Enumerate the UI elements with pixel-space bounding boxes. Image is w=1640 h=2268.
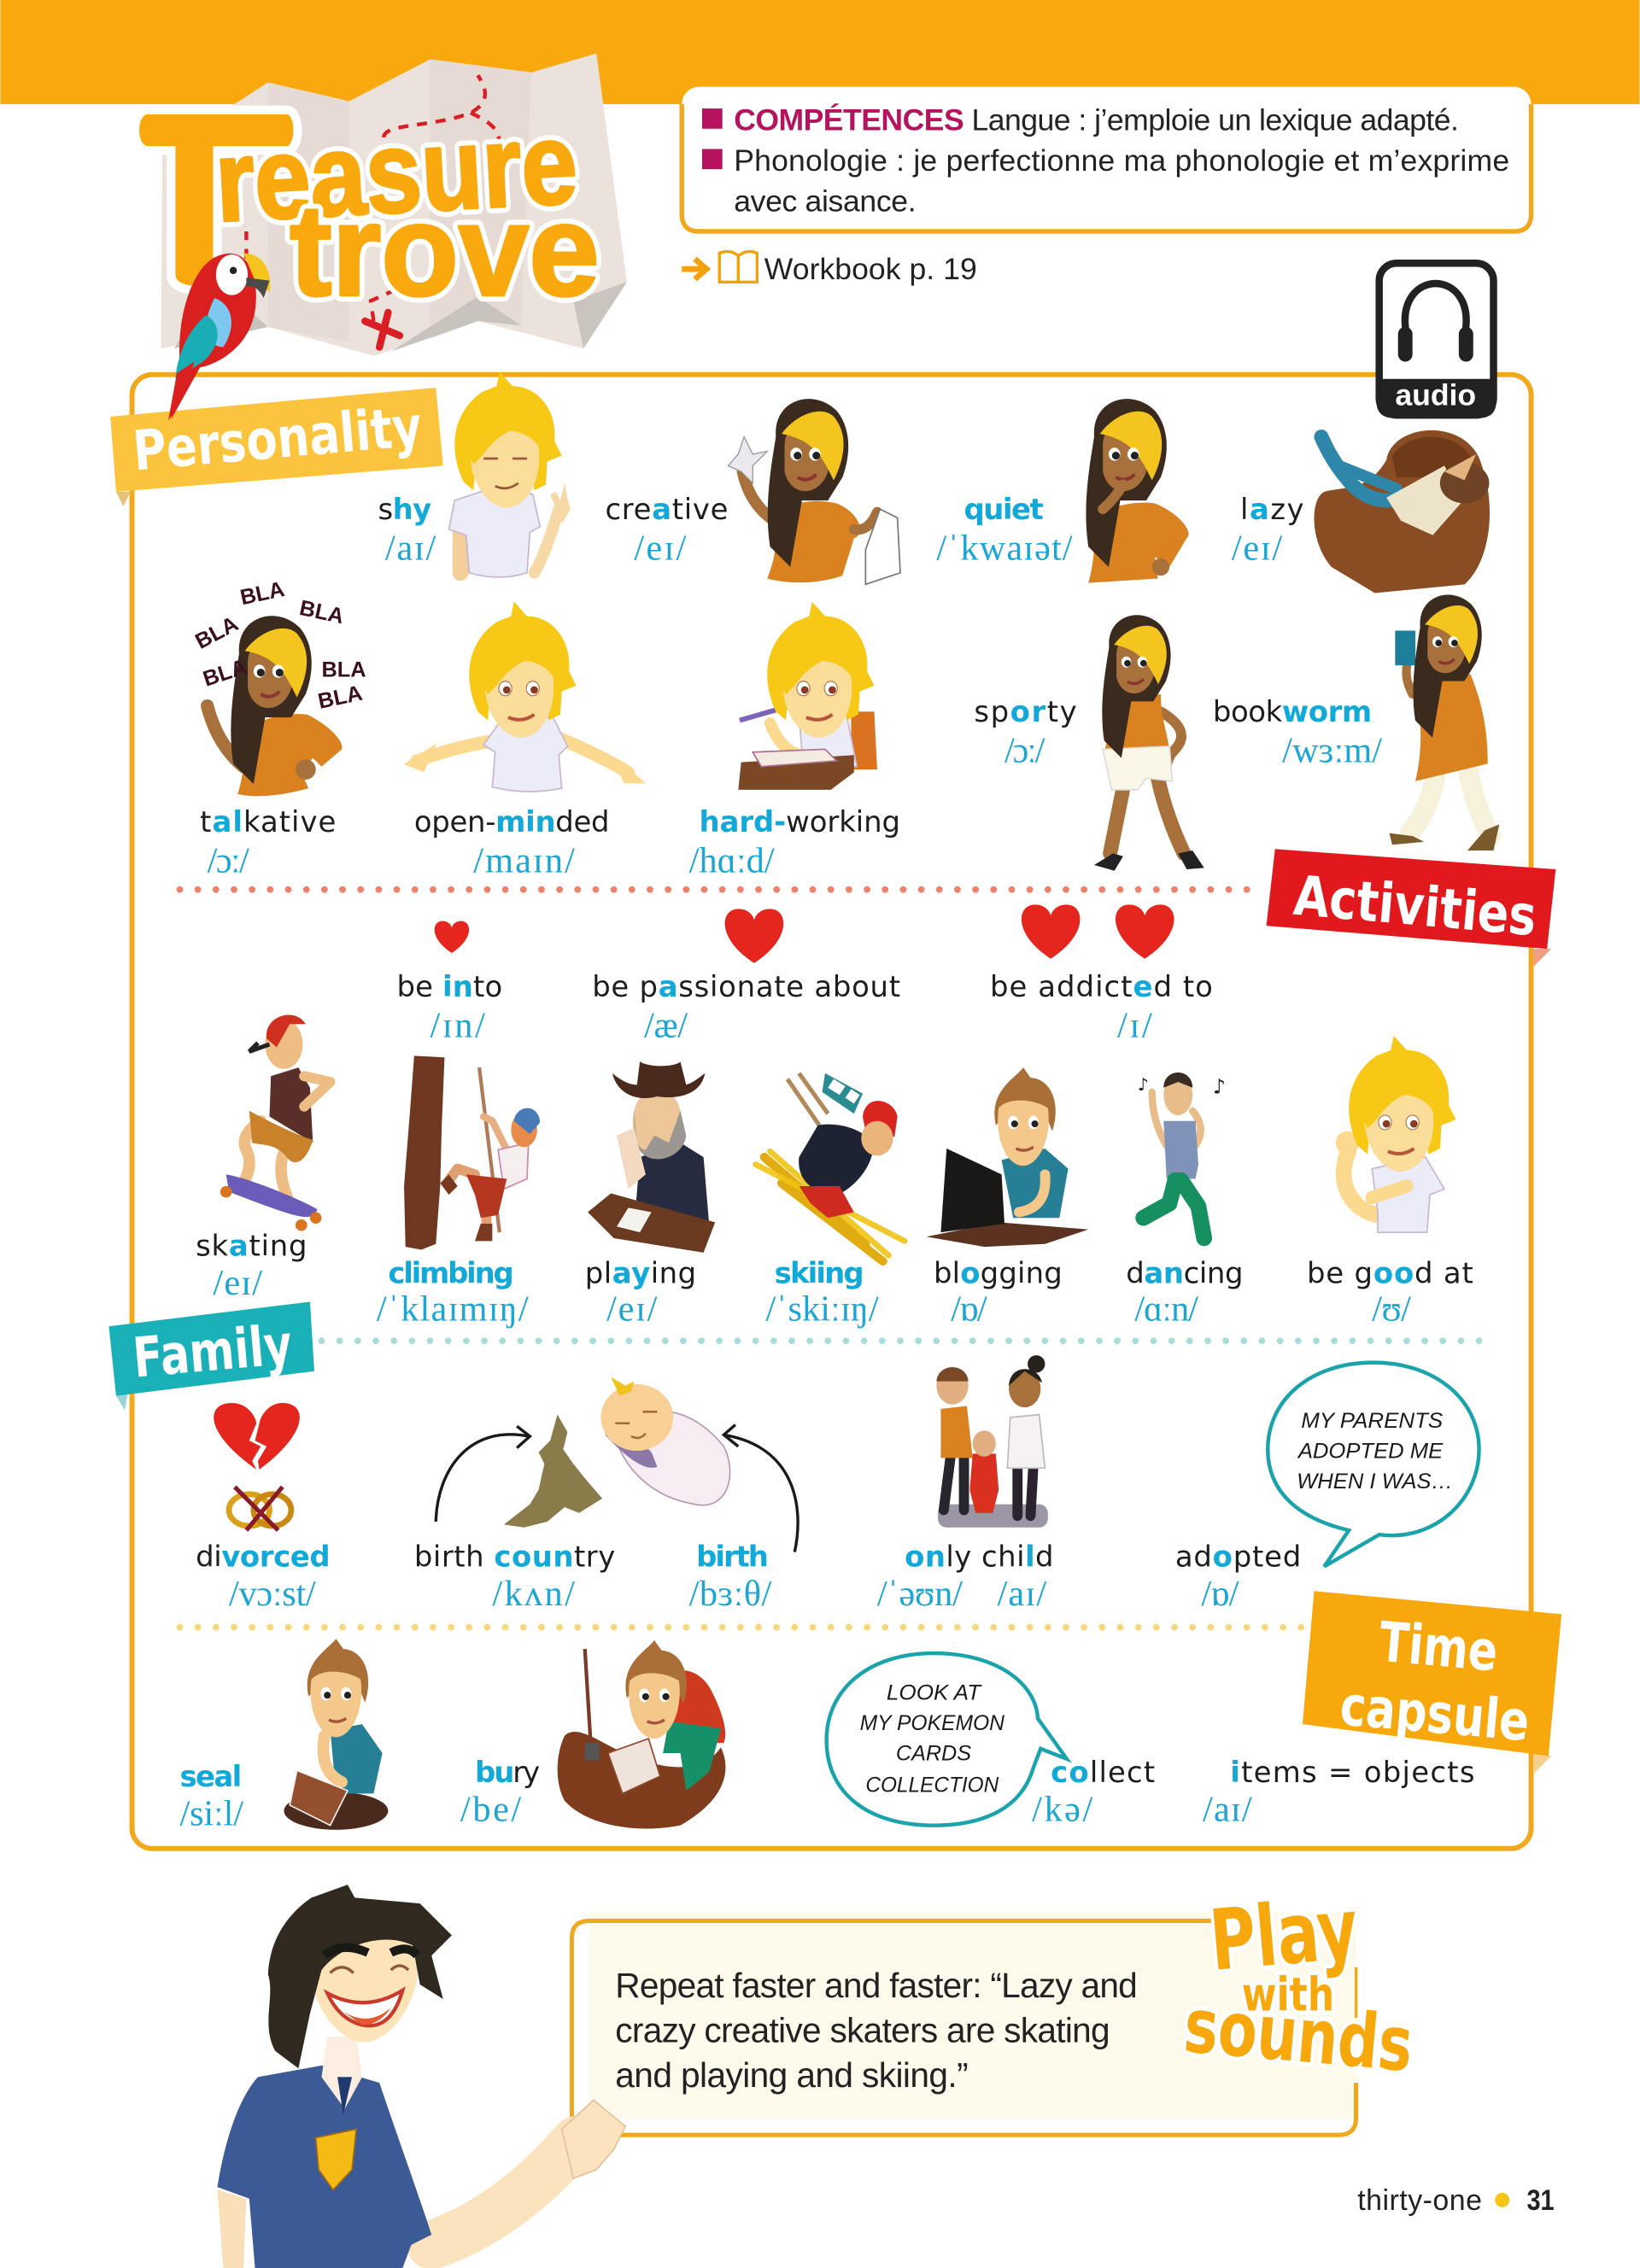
word: skating: /eɪ/	[213, 1263, 262, 1303]
icon: swaddled baby	[600, 1377, 730, 1505]
rhyme text: and playing and skiing.”	[615, 2055, 969, 2095]
word: be good at	[1307, 1256, 1473, 1330]
callout: adopted speech bubble: WHEN I WAS…	[1297, 1470, 1453, 1493]
word: collect: collect	[1051, 1756, 1155, 1789]
word: shy: shy	[378, 493, 431, 526]
word: be addicted to: /ɪ/	[1117, 1006, 1152, 1046]
word: skating	[196, 1229, 308, 1303]
word: only child: /aɪ/	[998, 1574, 1046, 1614]
word: collect	[1032, 1756, 1155, 1830]
word: bookworm	[1213, 695, 1382, 771]
word: divorced: divorced	[196, 1540, 331, 1573]
title with map	[135, 54, 627, 356]
word: hard-working: hard-working	[700, 805, 900, 839]
label: Personality: Personality	[131, 395, 425, 483]
figure: cowboy playing cards	[588, 1061, 715, 1253]
figure: climber and tree	[404, 1056, 540, 1250]
figure: shy boy	[449, 371, 571, 577]
title: Treasure trove: trove	[290, 178, 600, 324]
heading: Play with sounds	[1180, 1880, 1416, 2089]
word: creative: /eɪ/	[634, 529, 687, 569]
word: quiet: quiet	[964, 493, 1044, 526]
figure: open-minded boy	[408, 602, 640, 792]
figure: talkative girl: BLA	[316, 681, 365, 714]
word: skating: skating	[196, 1229, 308, 1262]
word: items = objects: items = objects	[1230, 1756, 1474, 1789]
title: Treasure trove: reasure	[212, 97, 580, 246]
figure: sporty girl	[1094, 615, 1204, 871]
word: blogging	[934, 1256, 1063, 1330]
callout: Pokemon speech bubble: COLLECTION	[865, 1774, 999, 1797]
word: dancing: /ɑːn/	[1134, 1289, 1198, 1330]
figure: boy sealing a box	[284, 1639, 388, 1830]
word: skiing: skiing	[775, 1256, 864, 1289]
figure: talkative girl: BLA	[297, 596, 346, 628]
dotted divider	[179, 1625, 1303, 1629]
word: bookworm: /wɜːm/	[1282, 731, 1382, 771]
figure: dancer: ♪	[1138, 1074, 1149, 1095]
icon: map of England	[504, 1415, 602, 1528]
rhyme text: Repeat faster and faster: “Lazy and	[615, 1966, 1138, 2005]
icon: audio	[1376, 263, 1496, 418]
heading: Play with sounds: sounds	[1180, 1981, 1416, 2089]
figure: talkative girl: BLA	[200, 655, 250, 692]
word: be addicted to: be addicted to	[990, 970, 1213, 1003]
word: bookworm: bookworm	[1213, 695, 1372, 728]
label: Activities	[1267, 849, 1555, 967]
word: be into	[397, 970, 502, 1046]
word: dancing	[1126, 1256, 1243, 1330]
word: open-minded: open-minded	[414, 805, 610, 839]
icon: broken heart and rings	[214, 1403, 300, 1530]
workbook reference: Workbook p. 19	[764, 252, 977, 286]
label: Family	[108, 1301, 314, 1411]
figure: boy burying a box	[558, 1640, 725, 1829]
word: seal: /siːl/	[179, 1794, 243, 1834]
word: collect: /kə/	[1032, 1790, 1093, 1830]
word: only child: /ˈəʊn/	[877, 1574, 963, 1614]
heading: Play with sounds: with	[1242, 1967, 1334, 2021]
callout: adopted speech bubble: ADOPTED ME	[1297, 1439, 1444, 1463]
word: items = objects: /aɪ/	[1203, 1790, 1252, 1830]
icon: heart be into	[435, 921, 469, 953]
word: items = objects	[1203, 1756, 1474, 1830]
icon: heart passionate	[725, 909, 783, 963]
panel: play with sounds	[572, 1880, 1416, 2135]
label: Time capsule: Time	[1377, 1610, 1501, 1685]
word: bury: bury	[475, 1756, 540, 1789]
word: birth country	[414, 1540, 615, 1614]
word: sporty: /ɔː/	[1004, 731, 1046, 771]
word: climbing	[377, 1256, 529, 1330]
title: Treasure trove: trove	[290, 178, 600, 324]
figure: large laughing boy	[217, 1885, 625, 2268]
word: hard-working	[689, 805, 900, 880]
word: divorced: /vɔːst/	[229, 1574, 316, 1614]
word: lazy: lazy	[1240, 493, 1304, 526]
icon: heart addicted 2	[1116, 904, 1174, 959]
callout: adopted speech bubble: MY PARENTS	[1301, 1409, 1443, 1433]
figure: family, only child	[936, 1355, 1048, 1528]
figure: blogger	[926, 1067, 1088, 1247]
label: Family: Family	[131, 1313, 295, 1391]
word: sporty	[974, 695, 1077, 771]
icon: heart addicted 1	[1022, 904, 1080, 959]
arrow: to baby	[723, 1424, 798, 1552]
word: divorced	[196, 1540, 331, 1614]
word: open-minded: /maɪn/	[473, 840, 575, 880]
figure: talkative girl: BLA	[238, 577, 287, 610]
word: bury: /be/	[460, 1790, 521, 1830]
heading: Play with sounds: Play	[1206, 1880, 1362, 1990]
label: Personality	[110, 388, 443, 506]
word: only child	[877, 1540, 1054, 1614]
word: hard-working: /hɑːd/	[689, 840, 775, 880]
word: seal: seal	[179, 1760, 242, 1793]
dotted divider	[179, 887, 1262, 891]
word: creative	[605, 493, 728, 569]
label: Activities: Activities	[1292, 864, 1539, 949]
word: lazy: /eɪ/	[1232, 529, 1282, 569]
figure: creative girl	[728, 399, 900, 584]
word: birth: /bɜːθ/	[689, 1574, 771, 1614]
word: blogging: blogging	[934, 1256, 1063, 1289]
word: birth country: /kʌn/	[492, 1574, 575, 1614]
rhyme text	[615, 1966, 1138, 2095]
word: be into: be into	[397, 970, 502, 1003]
competences box: avec aisance.	[734, 184, 917, 218]
figure: bookworm girl	[1390, 595, 1499, 850]
word: dancing: dancing	[1126, 1256, 1243, 1289]
word: be good at: be good at	[1307, 1256, 1473, 1289]
word: be passionate about: /æ/	[644, 1006, 688, 1046]
word: skiing: /ˈskiːɪŋ/	[765, 1289, 879, 1330]
arrow: to country	[436, 1426, 530, 1522]
icon: parrot	[168, 253, 270, 421]
word: be good at: /ʊ/	[1372, 1289, 1411, 1330]
word: adopted: adopted	[1175, 1540, 1301, 1573]
dotted divider	[321, 1339, 1488, 1343]
word: shy: /aɪ/	[385, 529, 436, 569]
icon: audio: audio	[1395, 377, 1476, 412]
word: birth country: birth country	[414, 1540, 615, 1573]
word: sporty: sporty	[974, 695, 1077, 728]
title: Treasure trove	[135, 97, 600, 324]
callout: Pokemon speech bubble: MY POKEMON	[860, 1711, 1005, 1735]
word: open-minded	[414, 805, 610, 880]
word: playing	[585, 1256, 696, 1330]
figure: talkative girl: BLA	[191, 612, 242, 654]
figure: talkative girl: BLA	[321, 658, 366, 682]
competences box: COMPÉTENCES Langue : j’emploie un lexique adapté.	[734, 102, 1459, 137]
word: talkative	[200, 805, 336, 880]
word: seal	[179, 1760, 243, 1834]
title: Treasure trove: reasure	[212, 97, 580, 246]
figure: dancer: ♪	[1213, 1075, 1226, 1099]
word: climbing: /ˈklaɪmɪŋ/	[377, 1289, 529, 1330]
word: adopted	[1175, 1540, 1301, 1614]
word: lazy	[1232, 493, 1304, 569]
figure: lazy boy in armchair	[1315, 430, 1490, 593]
word: skiing	[765, 1256, 879, 1330]
word: climbing: climbing	[388, 1256, 514, 1289]
word: adopted: /ɒ/	[1201, 1574, 1239, 1614]
callout: Pokemon speech bubble: CARDS	[896, 1741, 971, 1765]
figure: dancer	[1138, 1073, 1226, 1238]
footer page number: 31	[1526, 2184, 1555, 2217]
word: quiet: /ˈkwaɪət/	[936, 529, 1073, 569]
word: bury	[460, 1756, 540, 1830]
figure: talkative girl	[191, 577, 366, 796]
rhyme text: crazy creative skaters are skating	[615, 2011, 1110, 2050]
footer page number: thirty-one	[1357, 2184, 1482, 2217]
word: blogging: /ɒ/	[951, 1289, 987, 1330]
figure: boy flexing, be good at	[1336, 1036, 1456, 1232]
word: playing: /eɪ/	[606, 1289, 658, 1330]
competences box	[682, 87, 1532, 231]
word: talkative: talkative	[200, 805, 336, 839]
figure: quiet girl	[1086, 399, 1189, 583]
word: only child: only child	[905, 1540, 1054, 1573]
word: birth: birth	[696, 1540, 769, 1573]
word: playing: playing	[585, 1256, 696, 1289]
word: creative: creative	[605, 493, 728, 526]
word: shy	[378, 493, 436, 569]
competences box: Phonologie : je perfectionne ma phonologie et m’exprime	[734, 143, 1509, 178]
main vocabulary panel	[132, 375, 1532, 1849]
callout: Pokemon speech bubble	[827, 1653, 1067, 1826]
footer page number	[1357, 2184, 1555, 2217]
word: be into: /ɪn/	[430, 1006, 485, 1046]
top orange band	[0, 0, 1640, 104]
callout: adopted speech bubble	[1268, 1363, 1479, 1566]
figure: hard-working boy	[738, 602, 877, 790]
treasure map	[161, 54, 627, 356]
word: quiet	[936, 493, 1073, 569]
figure: skier	[756, 1073, 905, 1261]
figure: skater	[220, 1015, 331, 1230]
callout: Pokemon speech bubble: LOOK AT	[887, 1681, 983, 1704]
label: Time capsule: capsule	[1338, 1674, 1532, 1754]
word: birth	[689, 1540, 771, 1614]
word: talkative: /ɔː/	[208, 840, 249, 880]
word: be passionate about	[592, 970, 900, 1046]
word: be passionate about: be passionate about	[592, 970, 900, 1003]
word: be addicted to	[990, 970, 1213, 1046]
label: Time capsule	[1303, 1591, 1561, 1774]
